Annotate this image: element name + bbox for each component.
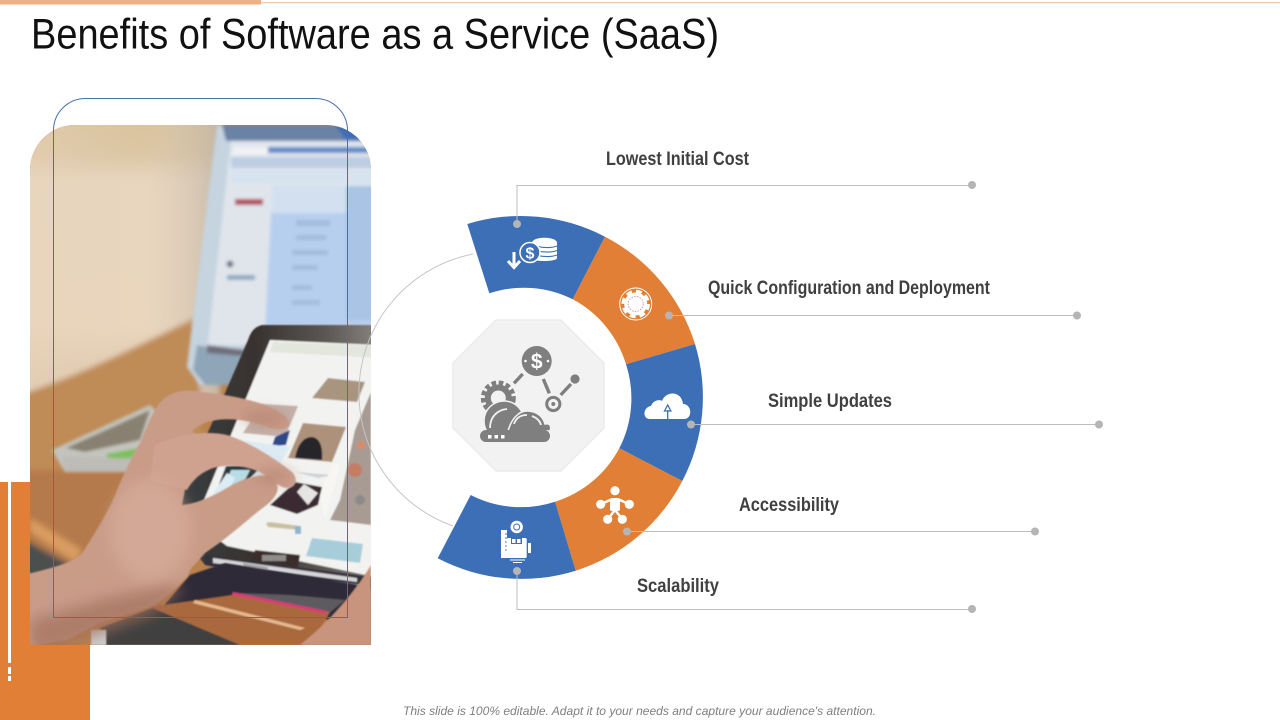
segment: accessibility [555, 448, 682, 571]
label: lowest initial cost: Lowest Initial Cost [606, 149, 750, 170]
hand: middle finger [184, 432, 296, 491]
hand: palm and arm [30, 398, 195, 645]
connector: lowest initial cost [513, 181, 976, 228]
photo: hand [18, 390, 296, 648]
connector: simple updates [687, 420, 1103, 428]
ring segments [438, 216, 703, 579]
icon: coins with down arrow: $ [526, 246, 535, 262]
thin background arc [359, 254, 473, 526]
photo: book on desk [52, 405, 165, 472]
label: simple updates: Simple Updates [768, 391, 892, 412]
center octagon [453, 320, 604, 471]
connector: accessibility [623, 528, 1039, 536]
segment: lowest initial cost [467, 216, 605, 299]
icon: cloud finance: $ [531, 350, 543, 374]
photo: desk foreground [91, 563, 371, 645]
title: Benefits of Software as a Service (SaaS) [31, 12, 719, 58]
hand shading [30, 412, 295, 650]
icon: cloud finance [480, 346, 580, 442]
photo: hand using a tablet in front of a laptop [18, 115, 380, 650]
icon: network person [596, 486, 634, 524]
footer note: This slide is 100% editable. Adapt it to your needs and capture your audience's attention. [403, 704, 876, 718]
label: accessibility: Accessibility [739, 495, 839, 516]
segment: simple updates [619, 344, 703, 481]
connector: quick configuration [665, 312, 1081, 320]
icon: scalability motor [501, 521, 531, 562]
orange corner block [0, 482, 90, 720]
photo: laptop [187, 125, 380, 385]
photo background: wall and desk [30, 125, 224, 574]
top accent bar [0, 0, 1280, 4]
photo outline frame [54, 98, 348, 618]
photo: tablet [170, 325, 380, 600]
icon: gear [620, 288, 652, 320]
segment: quick configuration [573, 237, 695, 364]
hand: index finger [165, 390, 290, 431]
icon: coins with down arrow [508, 238, 557, 268]
segment: scalability [438, 495, 576, 579]
hand: thumb [182, 474, 278, 567]
icon: cloud upload [644, 393, 690, 419]
label: quick configuration and deployment: Quick Configuration and Deployment [708, 278, 991, 299]
connector: scalability [513, 567, 976, 613]
label: scalability: Scalability [637, 576, 719, 597]
